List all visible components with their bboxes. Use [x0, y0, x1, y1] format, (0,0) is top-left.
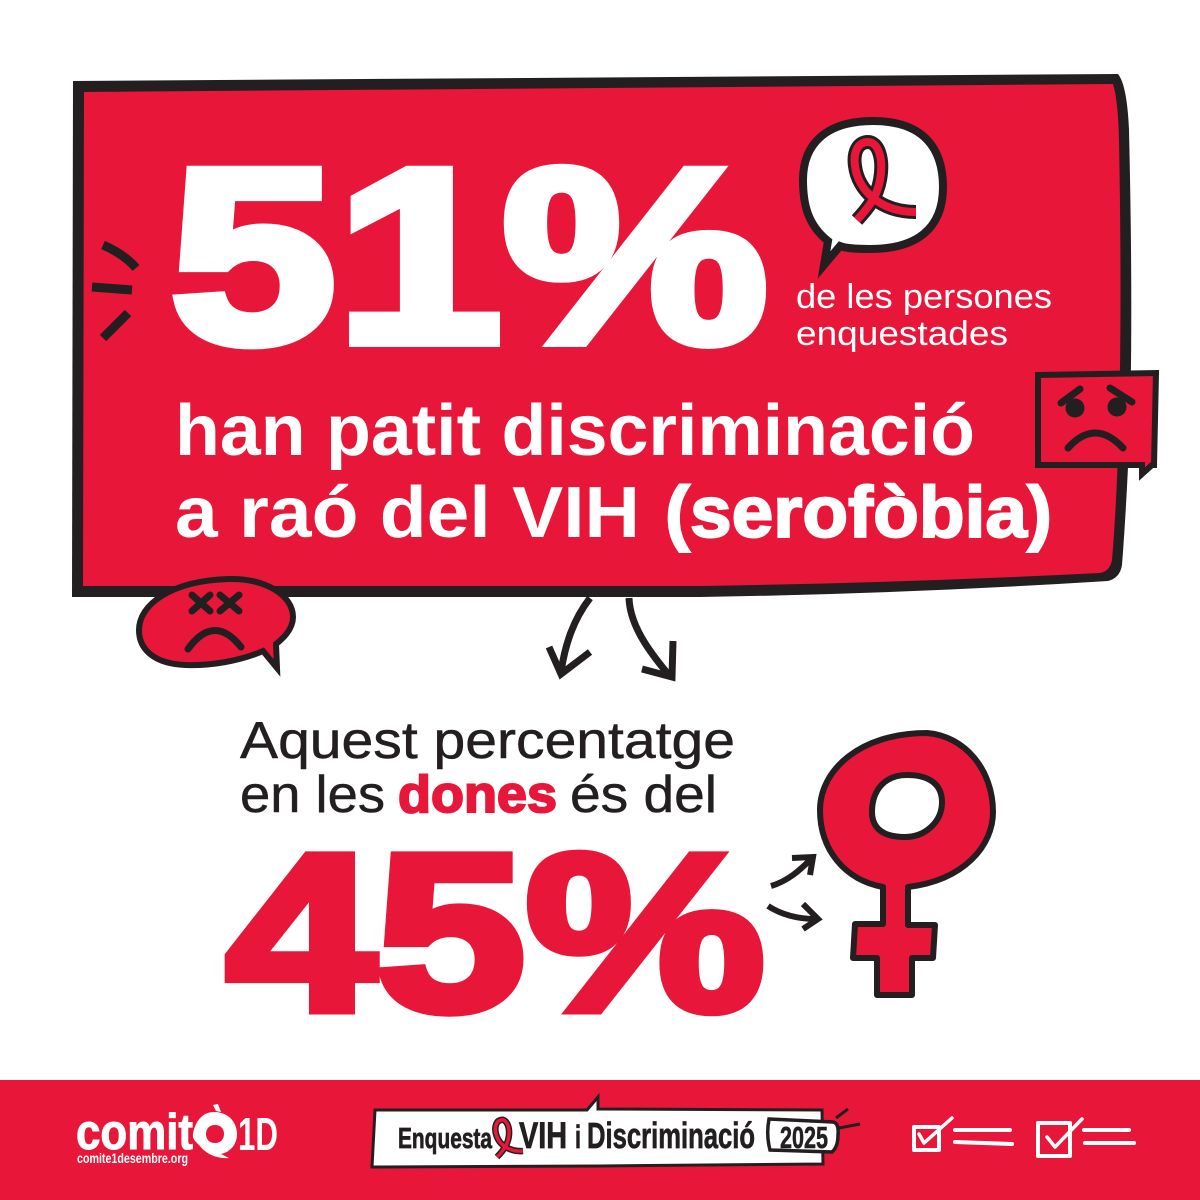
- text: Aquest percentatge en les dones és del: és del: [570, 766, 717, 824]
- text: Aquest percentatge en les dones és del: [240, 712, 735, 824]
- banner: Enquesta VIH i Discriminació 2025: i: [575, 1119, 581, 1155]
- banner: Enquesta VIH i Discriminació 2025: [372, 1097, 860, 1167]
- banner: Enquesta VIH i Discriminació 2025: Enquesta: [398, 1123, 493, 1155]
- big number: 51%: 51%: [170, 117, 768, 395]
- icon: emphasis strokes left of 51%: [92, 245, 136, 338]
- text: Aquest percentatge en les dones és del: dones: [398, 766, 557, 824]
- banner: Enquesta VIH i Discriminació 2025: 2025: [780, 1120, 828, 1155]
- logo: comitè 1D: comite1desembre.org: [77, 1150, 188, 1166]
- icon: first checklist: [914, 1118, 1012, 1150]
- text: de les persones enquestades: de les persones: [796, 278, 1052, 316]
- panel: footer band: [0, 1080, 1200, 1200]
- arrow: left down arrow: [549, 598, 590, 674]
- icon: second checklist: [1038, 1119, 1134, 1156]
- icon: female symbol: [820, 733, 993, 995]
- panel: main red statistic box: [72, 74, 1131, 597]
- arrow: right down arrow: [629, 598, 673, 677]
- big number: 45%: 45%: [226, 808, 765, 1058]
- icon: sad square speech bubble: [1038, 373, 1156, 474]
- banner: Enquesta VIH i Discriminació 2025: VIH: [519, 1115, 567, 1156]
- banner: Enquesta VIH i Discriminació 2025: Discriminació: [587, 1115, 755, 1156]
- text: de les persones enquestades: enquestades: [796, 315, 1008, 353]
- heading: han patit discriminació a raó del VIH (serofòbia): (serofòbia): [665, 473, 1052, 553]
- heading: han patit discriminació a raó del VIH (serofòbia): a raó del VIH: [175, 473, 640, 553]
- heading: han patit discriminació a raó del VIH (serofòbia): [175, 391, 1052, 553]
- arrow: lower small arrow to female symbol: [768, 904, 818, 929]
- text: Aquest percentatge en les dones és del: Aquest percentatge: [240, 712, 735, 770]
- logo: comitè 1D: [76, 1104, 278, 1166]
- icon: dizzy sad speech bubble: [139, 579, 293, 668]
- text: de les persones enquestades: [796, 278, 1052, 353]
- text: Aquest percentatge en les dones és del: en les: [240, 766, 385, 824]
- icon: speech bubble with red ribbon: [803, 121, 943, 265]
- logo: comitè 1D: comit: [76, 1104, 193, 1160]
- arrow: upper small arrow to female symbol: [771, 857, 813, 886]
- logo: comitè 1D: 1D: [238, 1108, 278, 1160]
- heading: han patit discriminació a raó del VIH (serofòbia): han patit discriminació: [175, 391, 975, 471]
